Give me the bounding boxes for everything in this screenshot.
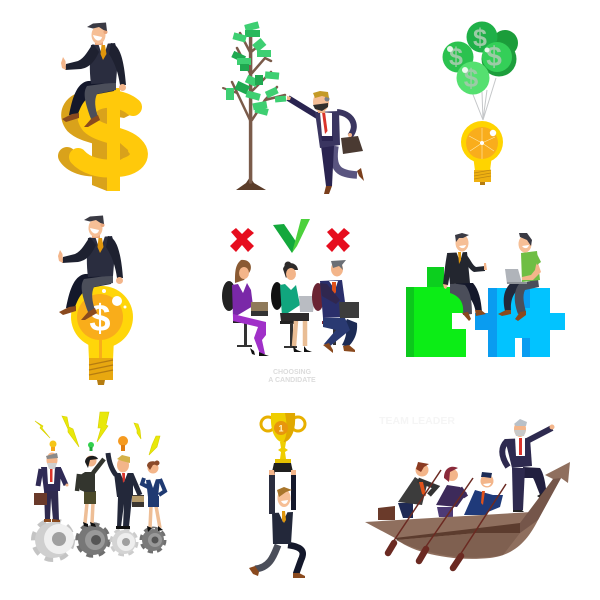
figure: standing leader	[502, 419, 554, 512]
figure: lunging businessman	[249, 470, 305, 578]
figure: rower one	[398, 462, 436, 518]
figure: businessman sitting on green piece	[443, 233, 487, 321]
icon: blue puzzle piece	[475, 288, 565, 357]
panel: choosing a candidate	[222, 219, 359, 384]
panel: man lifting trophy	[249, 413, 305, 578]
panel: team leader boat	[365, 415, 570, 568]
figure: woman with raised arm	[77, 456, 104, 527]
icon: red cross right	[326, 228, 350, 252]
candidate: man in navy suit	[312, 260, 359, 353]
panel: man sitting on dollar sign	[61, 22, 139, 191]
icon: balloon strings	[472, 78, 496, 120]
icon: green balloons: $	[486, 41, 502, 72]
figure: man in green shirt with laptop	[498, 233, 541, 321]
caption: CHOOSING	[273, 369, 312, 376]
icon: gears	[34, 521, 164, 559]
figure: woman in navy suit	[142, 460, 165, 532]
figure: running businessman with briefcase	[287, 91, 364, 194]
caption: A CANDIDATE	[268, 377, 316, 384]
icon: light bulb	[461, 121, 503, 185]
candidate: woman in teal	[271, 262, 315, 352]
icon: dollar symbol: $	[89, 298, 111, 340]
icon: red cross left	[230, 228, 254, 252]
icon: lightning bolts	[35, 412, 160, 455]
candidate: woman in purple	[222, 260, 269, 356]
panel: man reaching for money tree	[223, 21, 364, 194]
figure: seated businessman with thumb up	[58, 216, 123, 320]
medal number: 1	[278, 424, 284, 434]
icon: green balloons	[442, 22, 518, 94]
icon: idea bulbs	[50, 436, 128, 451]
figure: blond man with raised arm	[108, 453, 144, 529]
figure: rower three	[464, 472, 503, 515]
figure: senior man with briefcase	[34, 452, 68, 522]
figure: rower two	[436, 467, 467, 517]
icon: gold trophy	[261, 413, 305, 472]
figure: seated businessman with thumb up	[61, 22, 126, 127]
icon: green balloons: $	[449, 43, 463, 71]
faint heading: TEAM LEADER	[379, 415, 455, 427]
icon: green check	[273, 219, 310, 253]
icon: 3D dollar sign	[67, 88, 139, 191]
icon: dollar light bulb	[71, 286, 133, 385]
icon: boat with arrow bow	[365, 462, 570, 559]
icon: green balloons: $	[464, 63, 479, 93]
money bills	[226, 21, 286, 116]
icon: oars	[388, 470, 506, 568]
icon: green puzzle piece	[406, 267, 466, 357]
panel: two men on puzzle pieces	[406, 233, 565, 357]
caption	[268, 369, 316, 384]
icon: green balloons: $	[473, 24, 487, 52]
icon: money tree	[223, 21, 286, 190]
panel: light bulb lifted by balloons	[442, 22, 518, 185]
icon: briefcase	[378, 506, 395, 520]
panel: man sitting on dollar light bulb	[58, 216, 133, 385]
panel: team on gears with ideas	[34, 412, 165, 559]
